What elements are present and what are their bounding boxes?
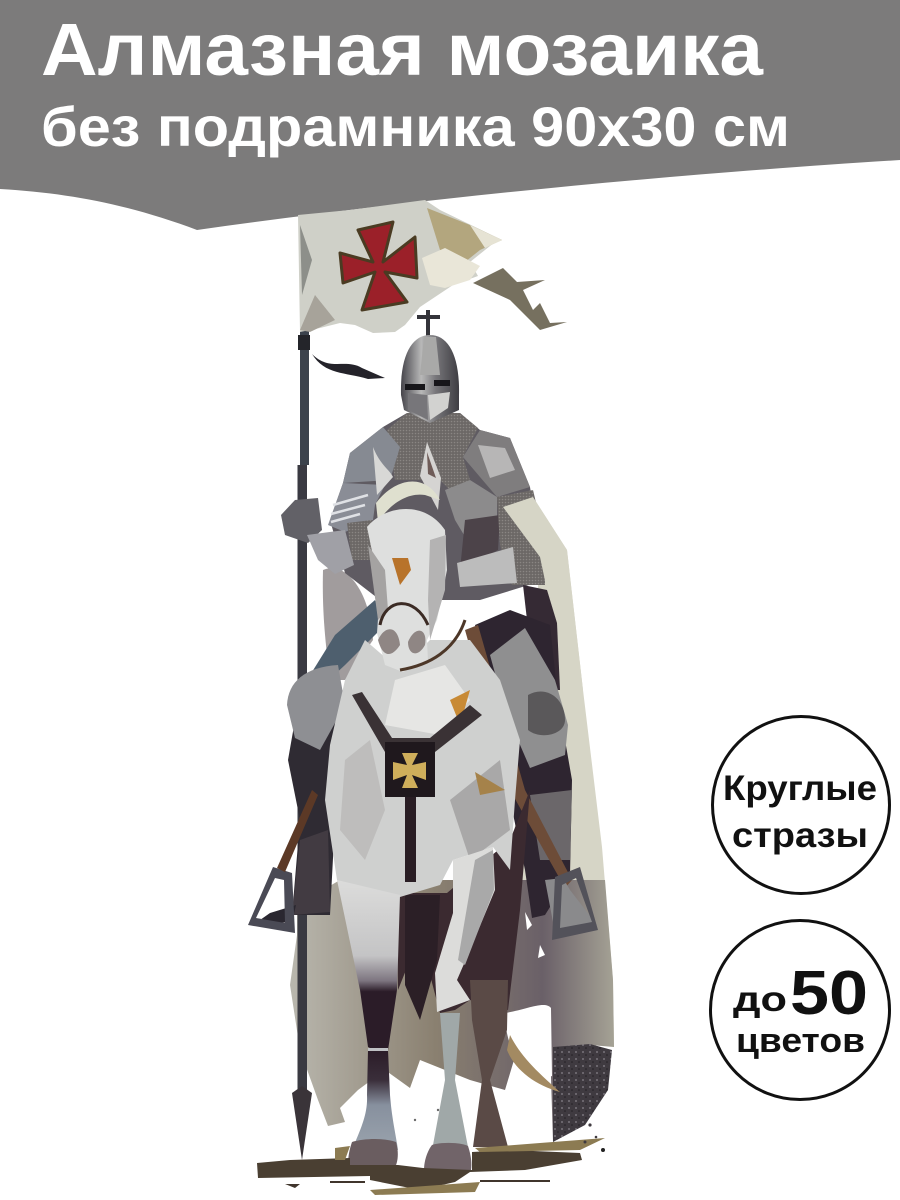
head	[367, 509, 465, 672]
body and chest	[325, 640, 520, 900]
raised right foreleg	[424, 847, 495, 1174]
banner pole and spearhead	[292, 215, 312, 1160]
badge: up to 50 colours	[710, 920, 890, 1100]
helmet with finial cross	[401, 310, 459, 423]
gauntlet and left arm	[281, 498, 322, 543]
left leg	[253, 600, 385, 925]
knight legs, armour and stirrups	[248, 600, 598, 940]
title: Алмазная мозаика	[41, 8, 764, 91]
right pauldron	[463, 430, 530, 497]
cape and background wash	[290, 497, 614, 1142]
pennant ribbon	[312, 354, 385, 379]
badge: round rhinestones: стразы	[732, 816, 868, 855]
badge: up to 50 colours: до	[733, 980, 787, 1019]
red cross emblem	[340, 222, 417, 310]
left foreleg	[337, 880, 400, 1170]
breast collar, plaque and gold cross	[352, 692, 482, 882]
subtitle: без подрамника 90х30 см	[41, 95, 790, 158]
badge: up to 50 colours: 50	[790, 959, 868, 1028]
badge: round rhinestones	[712, 716, 890, 894]
chain sleeve right	[497, 490, 545, 585]
dark hind area and tail	[397, 790, 530, 1147]
banner with red cross	[298, 200, 567, 333]
left pauldron	[343, 427, 400, 483]
header banner	[0, 0, 900, 230]
right leg	[465, 610, 572, 918]
right stirrup and boot	[545, 867, 598, 940]
right forearm	[457, 547, 517, 587]
badge: round rhinestones: Круглые	[723, 769, 877, 808]
gold cross	[393, 753, 426, 788]
neck, mane and ears	[373, 442, 441, 522]
badge: up to 50 colours: цветов	[736, 1022, 865, 1060]
illustration: mounted templar knight	[248, 200, 614, 1195]
left stirrup	[248, 790, 318, 933]
knight torso and armour	[281, 413, 545, 600]
left chain elbow	[347, 520, 372, 560]
horse	[325, 442, 530, 1174]
ground with mud and splatter	[257, 1109, 605, 1195]
white cape over shoulder	[503, 497, 583, 690]
